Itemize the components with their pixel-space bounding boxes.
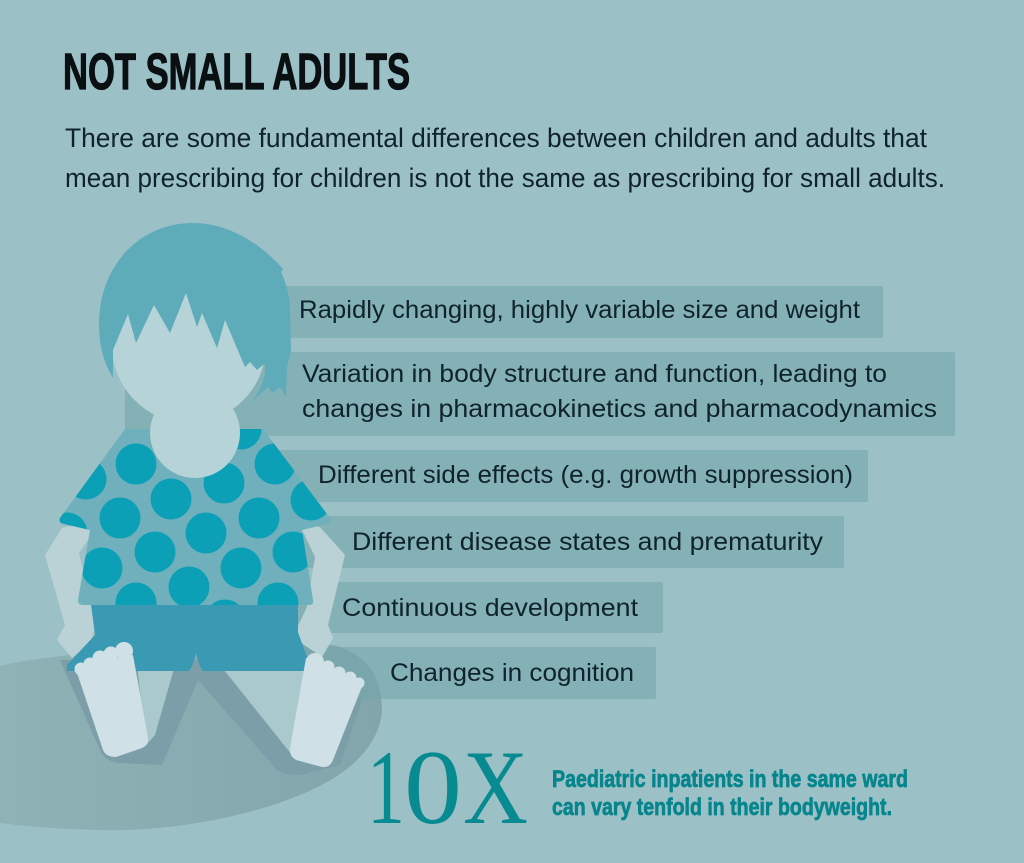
bar: side effects [220, 450, 868, 502]
intro text [65, 123, 945, 193]
feet [74, 642, 364, 767]
hair [99, 223, 291, 403]
statistic: 10X: 0 [404, 729, 462, 846]
neck [150, 388, 240, 478]
bar: disease states [220, 516, 844, 568]
statistic: 10X [367, 729, 528, 846]
statistic caption: Paediatric inpatients in the same ward [552, 766, 908, 793]
face [112, 267, 266, 423]
bar: side effects: Different side effects (e.g. growth suppression) [318, 461, 853, 489]
intro text: There are some fundamental differences between children and adults that [65, 123, 927, 153]
statistic: 10X: 1 [367, 729, 405, 846]
bar: cognition [300, 647, 656, 699]
bar: continuous development: Continuous development [342, 594, 638, 622]
panel: differences list [125, 286, 955, 699]
arms [45, 526, 345, 658]
bar: disease states: Different disease states and prematurity [352, 528, 824, 556]
bar: body structure [125, 352, 955, 436]
child figure [45, 223, 364, 775]
bar: body structure: Variation in body structure and function, leading to [302, 360, 887, 388]
floor shadow [0, 644, 382, 830]
shorts [67, 604, 312, 671]
shirt [60, 429, 330, 605]
bar: body structure: changes in pharmacokinetics and pharmacodynamics [302, 395, 937, 423]
statistic: 10X: X [463, 729, 528, 846]
intro text: mean prescribing for children is not the same as prescribing for small adults. [65, 163, 945, 193]
title: NOT SMALL ADULTS [63, 43, 410, 100]
statistic caption: can vary tenfold in their bodyweight. [552, 794, 892, 821]
leg shadow [60, 660, 362, 775]
bar: cognition: Changes in cognition [390, 659, 634, 687]
statistic caption [552, 766, 908, 821]
bar: size and weight [200, 286, 883, 338]
thighs [137, 665, 307, 755]
bar: size and weight: Rapidly changing, highly variable size and weight [299, 296, 860, 324]
bar: continuous development [220, 582, 663, 633]
